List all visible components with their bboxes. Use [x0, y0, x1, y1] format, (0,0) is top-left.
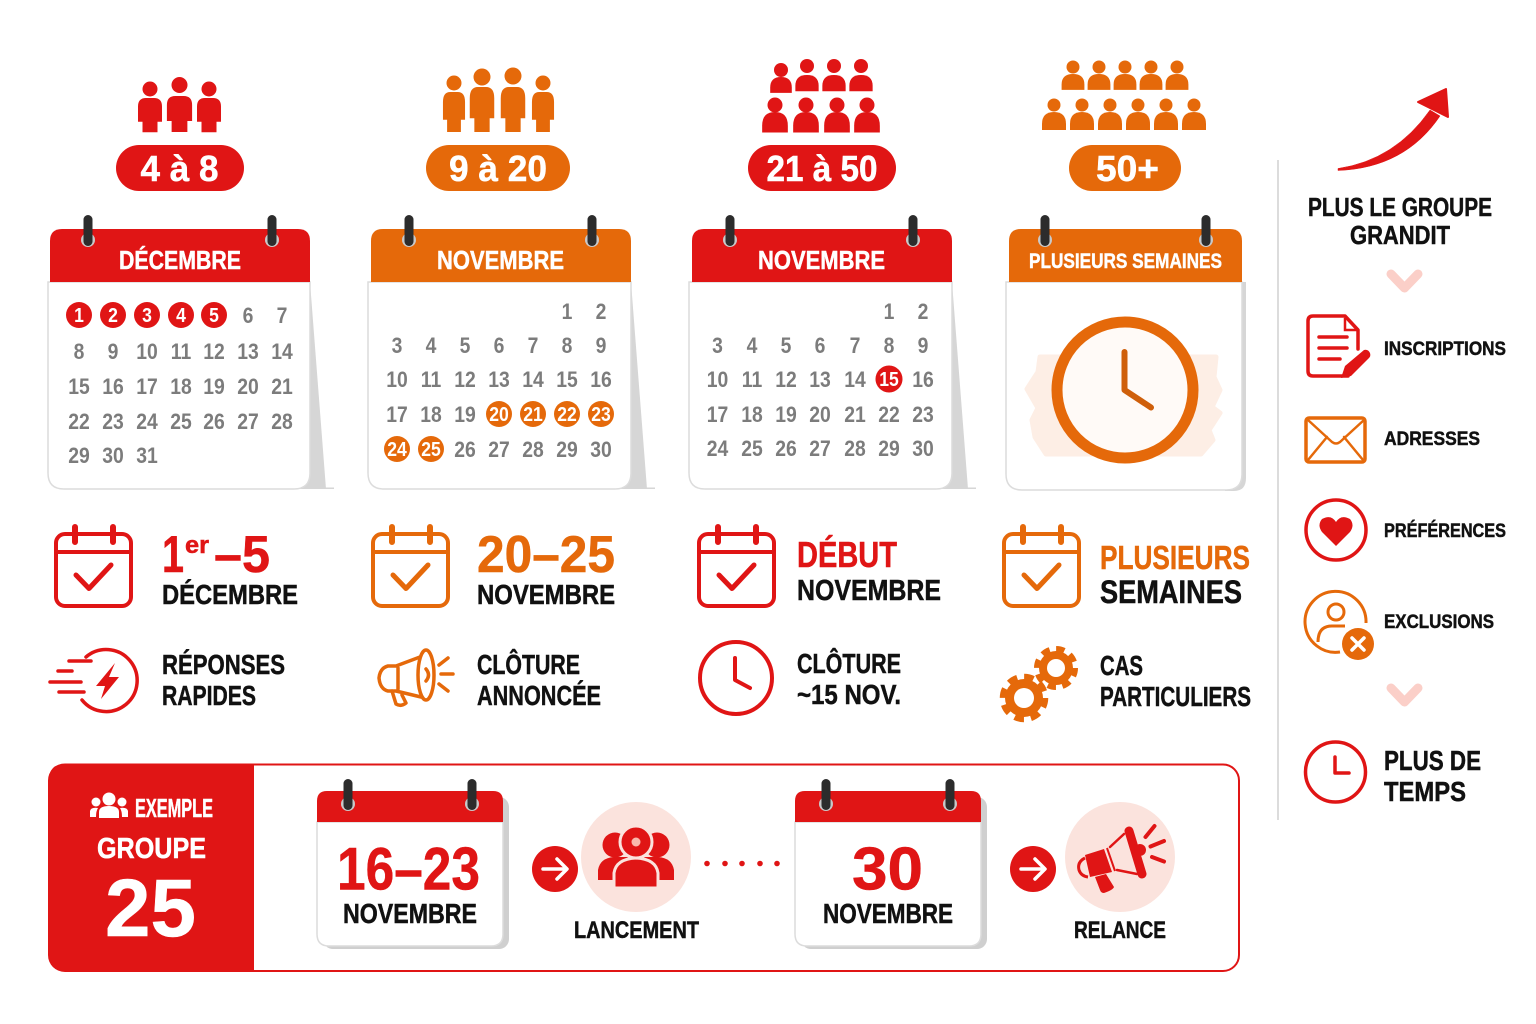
- calendar: novembre 15: 7: [850, 334, 860, 358]
- calendar: novembre 15: 14: [844, 368, 866, 392]
- date: 1er–5 décembre: er: [185, 532, 209, 559]
- icon: calendar check red: [699, 527, 774, 606]
- calendar: décembre: 19: [203, 375, 225, 399]
- calendar: décembre: [48, 215, 334, 489]
- calendar: décembre: 2: [108, 304, 118, 326]
- calendar: novembre 15: 27: [809, 437, 831, 461]
- badge: 9 à 20: 9 à 20: [449, 148, 547, 189]
- calendar: novembre 15: 23: [912, 403, 934, 427]
- calendar: novembre 15: 30: [912, 437, 934, 461]
- panel header: groupe 25: [49, 764, 254, 971]
- calendar: décembre: 23: [102, 410, 124, 434]
- date: début novembre: [797, 534, 941, 607]
- calendar: 30 novembre: [795, 779, 987, 949]
- panel: exemple groupe 25: [49, 764, 1239, 971]
- calendar: décembre: 12: [203, 340, 225, 364]
- heading: plus le groupe grandit: PLUS LE GROUPE: [1308, 192, 1492, 222]
- icon: chevron down: [1391, 274, 1418, 288]
- calendar: novembre 20-25: 30: [590, 438, 612, 462]
- calendar: novembre 15: 26: [775, 437, 797, 461]
- label: réponses rapides: RÉPONSES: [162, 649, 285, 680]
- date: 1er–5 décembre: –5: [214, 526, 270, 584]
- sidebar divider: [1277, 160, 1279, 820]
- calendar: novembre 20-25: 24: [387, 438, 407, 460]
- icon: calendar check orange: [1004, 527, 1079, 606]
- calendar: novembre 15: 13: [809, 368, 831, 392]
- calendar: décembre: 14: [271, 340, 293, 364]
- label: adresses: ADRESSES: [1384, 428, 1480, 450]
- dotted connector: [704, 861, 780, 866]
- panel header: groupe 25: EXEMPLE: [135, 793, 213, 823]
- calendar: novembre 15: 2: [918, 300, 928, 324]
- date: 20–25 novembre: 20–25: [477, 526, 615, 584]
- calendar: novembre 15: 8: [884, 334, 894, 358]
- calendar: décembre: 31: [136, 444, 158, 468]
- calendar: décembre: 9: [108, 340, 118, 364]
- calendar: novembre 15: 19: [775, 403, 797, 427]
- calendar: novembre 20-25: 27: [488, 438, 510, 462]
- calendar: novembre 20-25: 12: [454, 368, 476, 392]
- calendar: décembre: DÉCEMBRE: [119, 245, 241, 275]
- calendar: décembre: 6: [243, 304, 253, 328]
- calendar: novembre 15: [689, 215, 976, 489]
- arrow: to relance: [1010, 846, 1056, 892]
- calendar: décembre: 5: [209, 304, 219, 326]
- badge: 21 à 50: 21 à 50: [766, 148, 878, 189]
- calendar: décembre: 16: [102, 375, 124, 399]
- calendar: plusieurs semaines: [1006, 215, 1246, 491]
- calendar: novembre 15: 5: [781, 334, 791, 358]
- calendar: novembre 20-25: 9: [596, 334, 606, 358]
- calendar: décembre: 15: [68, 375, 90, 399]
- calendar: décembre: 21: [271, 375, 293, 399]
- calendar: décembre: 7: [277, 304, 287, 328]
- calendar: décembre: 8: [74, 340, 84, 364]
- label: clôture annoncée: ANNONCÉE: [477, 680, 601, 711]
- icon: calendar check red: [56, 527, 131, 606]
- label: exclusions: EXCLUSIONS: [1384, 611, 1494, 633]
- calendar: novembre 15: 20: [809, 403, 831, 427]
- calendar: décembre: 13: [237, 340, 259, 364]
- calendar: novembre 15: 12: [775, 368, 797, 392]
- calendar: novembre 20-25: 6: [494, 334, 504, 358]
- calendar: décembre: 11: [171, 340, 191, 364]
- calendar: novembre 20-25: 28: [522, 438, 544, 462]
- label: réponses rapides: RAPIDES: [162, 680, 256, 711]
- calendar: 30 novembre: NOVEMBRE: [823, 898, 953, 929]
- label: clôture annoncée: CLÔTURE: [477, 648, 580, 680]
- calendar: novembre 20-25: 16: [590, 368, 612, 392]
- calendar: novembre 20-25: 10: [386, 368, 408, 392]
- calendar: novembre 15: 22: [878, 403, 900, 427]
- arrow: to lancement: [532, 846, 578, 892]
- icon: clock red: [700, 642, 772, 714]
- calendar: novembre 20-25: 13: [488, 368, 510, 392]
- icon: gears: [1003, 649, 1075, 719]
- calendar: novembre 15: 16: [912, 368, 934, 392]
- calendar: novembre 15: 18: [741, 403, 763, 427]
- calendar: novembre 20-25: 26: [454, 438, 476, 462]
- badge: 4 à 8: [116, 145, 244, 191]
- calendar: novembre 20-25: 18: [420, 403, 442, 427]
- calendar: décembre: 17: [136, 375, 158, 399]
- calendar: novembre 15: 9: [918, 334, 928, 358]
- panel header: groupe 25: 25: [105, 863, 196, 954]
- icon: relance megaphone: [1065, 802, 1175, 912]
- label: cas particuliers: PARTICULIERS: [1100, 681, 1251, 712]
- label: cas particuliers: CAS: [1100, 650, 1143, 681]
- label: plus de temps: PLUS DE: [1384, 745, 1481, 776]
- icon: calendar check orange: [373, 527, 448, 606]
- date: 1er–5 décembre: DÉCEMBRE: [162, 579, 298, 610]
- calendar: décembre: 26: [203, 410, 225, 434]
- people icon: 21 à 50: [762, 59, 880, 133]
- arrow: growth: [1338, 89, 1448, 170]
- calendar: novembre 20-25: 17: [386, 403, 408, 427]
- label: clôture 15 nov: [797, 647, 901, 710]
- label: clôture annoncée: [477, 648, 601, 711]
- badge: 9 à 20: [426, 145, 570, 191]
- calendar: novembre 20-25: 7: [528, 334, 538, 358]
- icon: document with pen: [1308, 316, 1370, 378]
- label: cas particuliers: [1100, 650, 1251, 712]
- calendar: novembre 15: NOVEMBRE: [758, 245, 885, 275]
- date: 20–25 novembre: [477, 526, 615, 610]
- calendar: novembre 20-25: 11: [421, 368, 441, 392]
- icon: megaphone outline: [379, 650, 453, 705]
- date: plusieurs semaines: SEMAINES: [1100, 574, 1242, 610]
- calendar: novembre 15: 1: [884, 300, 894, 324]
- people icon: 4 à 8: [138, 77, 221, 132]
- calendar: novembre 20-25: 1: [562, 300, 572, 324]
- calendar: novembre 20-25: NOVEMBRE: [437, 245, 564, 275]
- calendar: novembre 20-25: 15: [556, 368, 578, 392]
- label: préférences: PRÉFÉRENCES: [1384, 519, 1506, 542]
- icon: fast lightning: [50, 650, 137, 712]
- calendar: novembre 15: 11: [742, 368, 762, 392]
- calendar: novembre 20-25: 8: [562, 334, 572, 358]
- calendar: décembre: 25: [170, 410, 192, 434]
- calendar: novembre 20-25: 20: [489, 403, 509, 425]
- calendar: décembre: 29: [68, 444, 90, 468]
- calendar: décembre: 30: [102, 444, 124, 468]
- heading: plus le groupe grandit: GRANDIT: [1350, 220, 1450, 250]
- calendar: décembre: 24: [136, 410, 158, 434]
- calendar: décembre: 10: [136, 340, 158, 364]
- calendar: novembre 20-25: 21: [523, 403, 543, 425]
- calendar: novembre 15: 28: [844, 437, 866, 461]
- calendar: novembre 20-25: 25: [421, 438, 441, 460]
- label: clôture 15 nov: ~15 NOV.: [797, 679, 901, 710]
- people icon: 9 à 20: [443, 68, 554, 132]
- panel header: groupe 25: GROUPE: [97, 833, 206, 865]
- icon: clock: [1306, 742, 1366, 802]
- calendar: décembre: 27: [237, 410, 259, 434]
- label: inscriptions: INSCRIPTIONS: [1384, 338, 1506, 360]
- date: plusieurs semaines: PLUSIEURS: [1100, 539, 1250, 576]
- icon: chevron down: [1391, 688, 1418, 702]
- calendar: novembre 15: 24: [707, 437, 729, 461]
- calendar: novembre 15: 17: [707, 403, 728, 427]
- label: plus de temps: TEMPS: [1384, 776, 1466, 807]
- calendar: novembre 15: 15: [879, 368, 899, 390]
- calendar: novembre 15: 21: [844, 403, 866, 427]
- calendar: novembre 20-25: 3: [392, 334, 402, 358]
- calendar: plusieurs semaines: PLUSIEURS SEMAINES: [1029, 250, 1222, 273]
- calendar: novembre 20-25: 23: [591, 403, 611, 425]
- badge: 4 à 8: 4 à 8: [140, 148, 218, 189]
- icon: lancement group: [581, 802, 691, 912]
- badge: 50+: [1069, 145, 1181, 191]
- calendar: décembre: 28: [271, 410, 293, 434]
- label: plus de temps: [1384, 745, 1481, 807]
- calendar: novembre 20-25: 2: [596, 300, 606, 324]
- icon: envelope: [1306, 418, 1365, 462]
- calendar: novembre 15: 29: [878, 437, 900, 461]
- label: clôture 15 nov: CLÔTURE: [797, 647, 901, 679]
- date: 20–25 novembre: NOVEMBRE: [477, 579, 615, 610]
- calendar: novembre 20-25: 14: [522, 368, 544, 392]
- date: début novembre: NOVEMBRE: [797, 575, 941, 607]
- calendar: 30 novembre: 30: [852, 836, 923, 902]
- calendar: novembre 20-25: 22: [557, 403, 577, 425]
- calendar: novembre 15: 6: [815, 334, 825, 358]
- calendar: novembre 15: 25: [741, 437, 763, 461]
- calendar: décembre: 3: [142, 304, 152, 326]
- badge: 50+: 50+: [1096, 148, 1159, 189]
- icon: heart: [1306, 500, 1366, 560]
- calendar: décembre: 22: [68, 410, 90, 434]
- calendar: novembre 20-25: 19: [454, 403, 476, 427]
- calendar: novembre 15: 3: [712, 334, 723, 358]
- calendar: décembre: 20: [237, 375, 259, 399]
- icon: exclusions user: [1305, 591, 1374, 660]
- calendar: 16-23 novembre: [317, 779, 509, 949]
- date: plusieurs semaines: [1100, 539, 1250, 610]
- date: début novembre: DÉBUT: [797, 534, 897, 575]
- date: 1er–5 décembre: 1: [162, 526, 184, 584]
- calendar: novembre 15: 4: [747, 334, 758, 358]
- people icon: 50+: [1042, 60, 1206, 130]
- calendar: 16-23 novembre: 16–23: [337, 836, 480, 902]
- label: lancement: LANCEMENT: [574, 917, 699, 944]
- calendar: décembre: 18: [170, 375, 192, 399]
- calendar: novembre 20-25: 4: [426, 334, 437, 358]
- calendar: décembre: 1: [74, 304, 84, 326]
- calendar: novembre 20-25: 5: [460, 334, 470, 358]
- calendar: novembre 20-25: 29: [556, 438, 578, 462]
- date: 1er–5 décembre: [162, 526, 298, 610]
- label: réponses rapides: [162, 649, 285, 711]
- calendar: 16-23 novembre: NOVEMBRE: [343, 898, 477, 929]
- heading: plus le groupe grandit: [1308, 192, 1492, 250]
- calendar: décembre: 4: [176, 304, 186, 326]
- label: relance: RELANCE: [1074, 917, 1166, 944]
- calendar: novembre 15: 10: [707, 368, 728, 392]
- calendar: novembre 20-25: [368, 215, 655, 489]
